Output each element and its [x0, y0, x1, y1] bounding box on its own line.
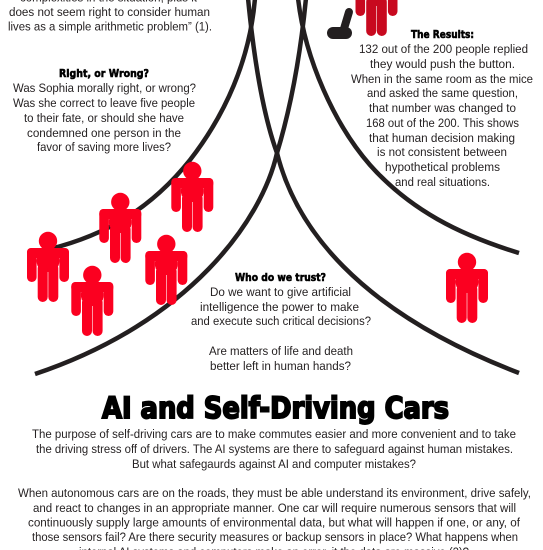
- panel: the results: [351, 28, 533, 189]
- heading: right or wrong: Right, or Wrong?: [59, 67, 149, 80]
- text block: results body: When in the same room as the mice: [351, 72, 533, 86]
- text block: arithmetic quote: does not seem right to consider human: [9, 5, 210, 19]
- icon: lever button: [327, 12, 352, 39]
- icon: single person on the track: [446, 253, 488, 323]
- text block: results body: 168 out of the 200. This shows: [366, 116, 519, 130]
- text block: results body: [351, 42, 533, 189]
- text block: results body: and asked the same question,: [367, 86, 518, 100]
- text block: purpose of self-driving cars: the driving stress off of drivers. The AI systems are there to safeguard against human mistakes.: [36, 442, 513, 456]
- text block: who do we trust body: [191, 285, 371, 373]
- panel: right or wrong: [13, 67, 196, 154]
- text block: arithmetic quote: lives as a simple arithmetic problem” (1).: [8, 20, 212, 34]
- text block: results body: 132 out of the 200 people replied: [359, 42, 528, 56]
- text block: results body: is not consistent between: [377, 145, 507, 159]
- text block: right or wrong body: favor of saving more lives?: [37, 140, 171, 154]
- trolley tracks: [35, 0, 519, 374]
- text block: results body: that number was changed to: [369, 101, 516, 115]
- text block: autonomous cars sensors: and react to changes in an appropriate manner. One car will require numerous sensors that will: [33, 501, 516, 515]
- title: AI and Self-Driving Cars: AI and Self-Driving Cars: [102, 391, 449, 425]
- text block: who do we trust body: better left in human hands?: [210, 359, 351, 373]
- text block: results body: they would push the button.: [370, 57, 515, 71]
- text block: right or wrong body: Was Sophia morally right, or wrong?: [13, 81, 196, 95]
- text block: right or wrong body: [13, 81, 196, 154]
- text block: autonomous cars sensors: continuously supply large amounts of environmental data, but what will happen if one, or any, of: [28, 516, 521, 530]
- text block: purpose of self-driving cars: [32, 427, 516, 471]
- text block: who do we trust body: Do we want to give artificial: [210, 285, 351, 299]
- text block: purpose of self-driving cars: The purpose of self-driving cars are to make commutes easier and more convenient and to take: [32, 427, 516, 441]
- heading: the results: The Results:: [411, 28, 474, 41]
- text block: results body: hypothetical problems: [385, 160, 500, 174]
- panel: who do we trust: [191, 271, 371, 373]
- text block: arithmetic quote: [8, 0, 212, 34]
- text block: autonomous cars sensors: those sensors fail? Are there security measures or backup sensors in place? What happens when: [32, 530, 518, 544]
- group: five people on the track: [27, 162, 213, 336]
- track: upper left branch: [50, 0, 255, 249]
- text block: who do we trust body: and execute such critical decisions?: [191, 314, 371, 328]
- track: lower right branch: [248, 0, 519, 373]
- icon: person at the button: [356, 0, 398, 36]
- text block: who do we trust body: intelligence the power to make: [200, 300, 359, 314]
- text block: results body: that human decision making: [369, 131, 515, 145]
- text block: results body: and real situations.: [395, 175, 490, 189]
- text block: autonomous cars sensors: [18, 486, 531, 550]
- text block: right or wrong body: condemned one person in the: [27, 126, 181, 140]
- text block: right or wrong body: Was she correct to leave five people: [13, 96, 195, 110]
- text block: purpose of self-driving cars: But what safegaurds against AI and computer mistakes?: [132, 457, 416, 471]
- track: upper right branch: [298, 0, 519, 253]
- text block: who do we trust body: Are matters of life and death: [209, 344, 353, 358]
- heading: who do we trust: Who do we trust?: [235, 271, 326, 284]
- track: lower left branch: [35, 0, 306, 374]
- text block: right or wrong body: to their fate, or should she have: [24, 111, 184, 125]
